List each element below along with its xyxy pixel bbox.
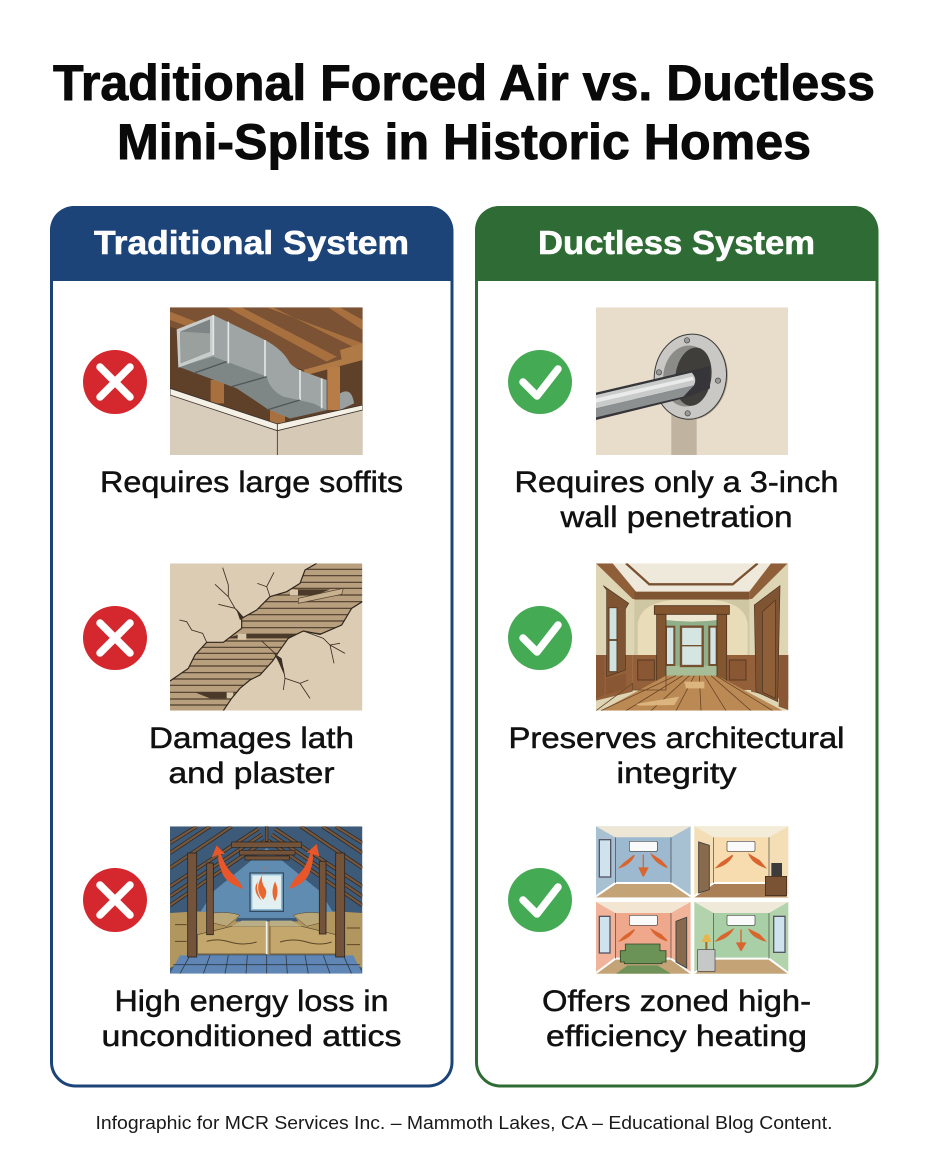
blue room bbox=[596, 826, 691, 897]
panel header: traditional system: Traditional System bbox=[94, 224, 409, 261]
panel header: ductless system bbox=[475, 206, 878, 281]
illustration: small wall penetration bbox=[596, 307, 788, 455]
green room bbox=[694, 902, 788, 974]
label: requires large soffits: Requires large soffits bbox=[100, 466, 403, 499]
label: high energy loss in unconditioned attics: unconditioned attics bbox=[102, 1020, 402, 1053]
label: damages lath and plaster bbox=[149, 722, 354, 790]
label: preserves architectural integrity: integrity bbox=[616, 757, 736, 790]
label: requires only a 3-inch wall penetration: Requires only a 3-inch bbox=[514, 466, 838, 499]
coral room bbox=[596, 902, 691, 974]
label: high energy loss in unconditioned attics bbox=[102, 985, 402, 1053]
illustration: damaged lath and plaster bbox=[170, 563, 362, 711]
panel header: ductless system: Ductless System bbox=[538, 224, 815, 261]
icon: red x bbox=[83, 606, 147, 670]
label: requires only a 3-inch wall penetration bbox=[514, 466, 838, 534]
label: offers zoned high-efficiency heating: efficiency heating bbox=[546, 1020, 807, 1053]
beige room bbox=[694, 826, 788, 897]
panel: traditional system bbox=[50, 206, 453, 1086]
label: offers zoned high-efficiency heating: Offers zoned high- bbox=[542, 985, 811, 1018]
icon: green check bbox=[508, 350, 572, 414]
icon: red x bbox=[83, 868, 147, 932]
title bbox=[53, 55, 875, 170]
illustration: ductwork in soffit bbox=[170, 307, 363, 455]
panel header: traditional system bbox=[50, 206, 453, 281]
illustration: zoned heating rooms bbox=[596, 826, 788, 974]
title: Traditional Forced Air vs. Ductless bbox=[53, 55, 875, 111]
icon: green check bbox=[508, 606, 572, 670]
label: offers zoned high-efficiency heating bbox=[542, 985, 811, 1053]
label: high energy loss in unconditioned attics: High energy loss in bbox=[114, 985, 388, 1018]
label: requires only a 3-inch wall penetration: wall penetration bbox=[559, 501, 792, 534]
label: damages lath and plaster: and plaster bbox=[168, 757, 335, 790]
illustration: preserved historic interior bbox=[596, 563, 788, 711]
label: preserves architectural integrity bbox=[508, 722, 844, 790]
icon: green check bbox=[508, 868, 572, 932]
title: Mini-Splits in Historic Homes bbox=[117, 114, 811, 170]
footer note: Infographic for MCR Services Inc. – Mammoth Lakes, CA – Educational Blog Content. bbox=[96, 1112, 832, 1133]
icon: red x bbox=[83, 350, 147, 414]
label: preserves architectural integrity: Preserves architectural bbox=[508, 722, 844, 755]
label: damages lath and plaster: Damages lath bbox=[149, 722, 354, 755]
panel: ductless system bbox=[475, 206, 878, 1086]
illustration: attic energy loss bbox=[170, 826, 362, 974]
